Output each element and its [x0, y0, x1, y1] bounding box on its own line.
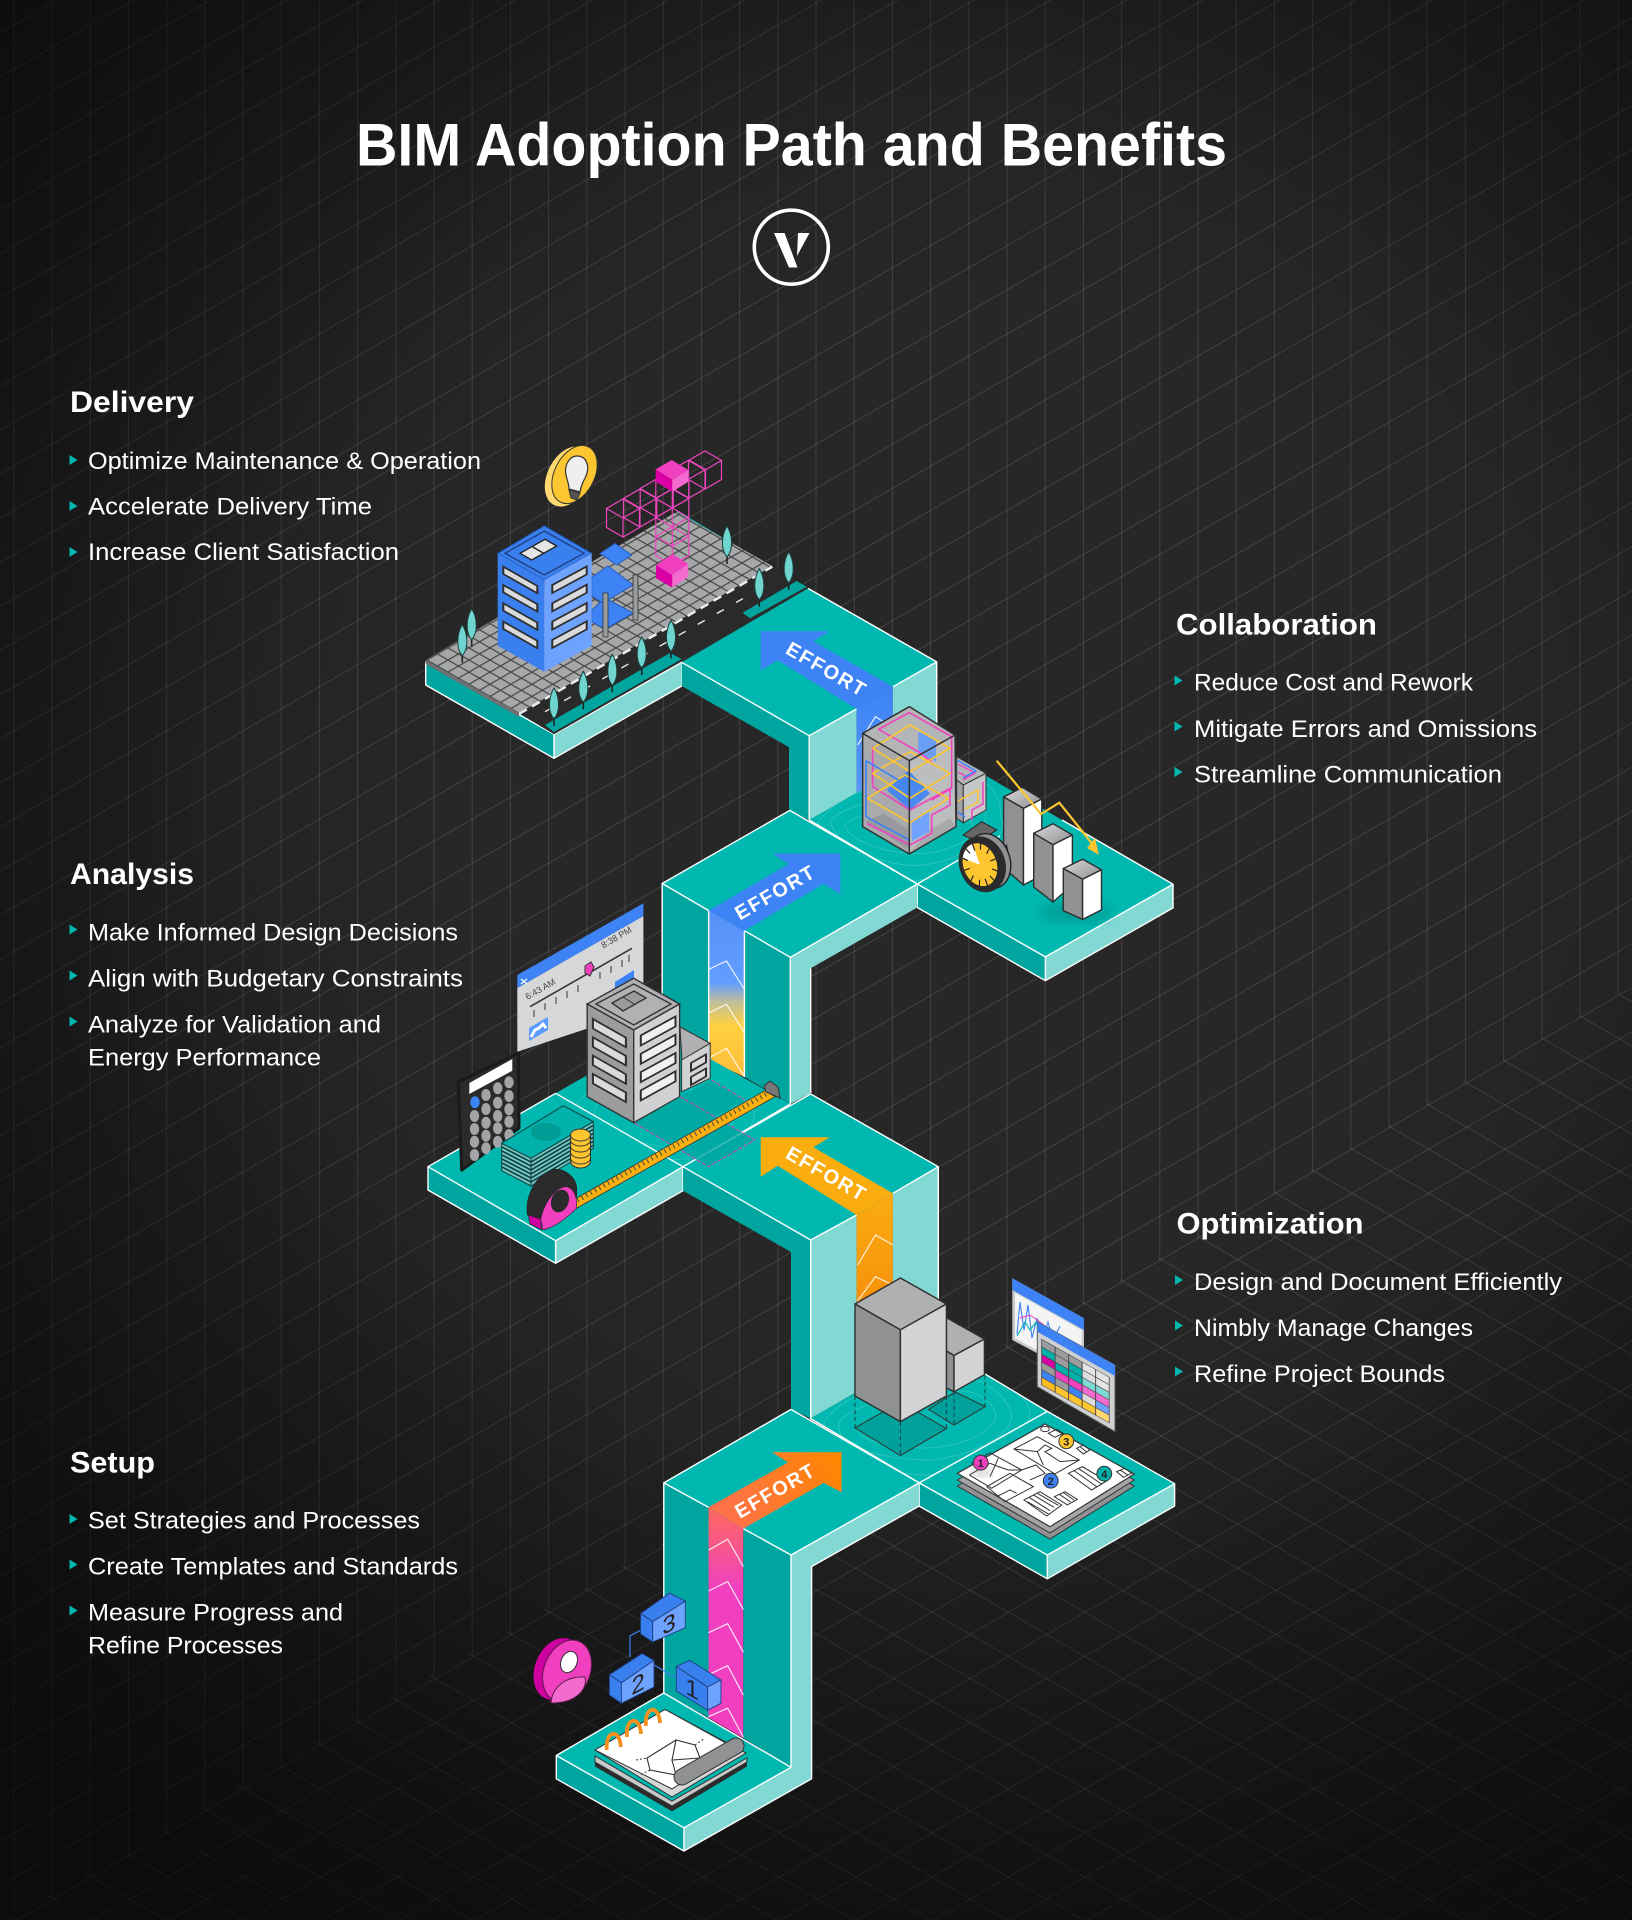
window: line chart	[1012, 1278, 1084, 1378]
text block: Analysis	[70, 858, 463, 1072]
panel: optimization platform	[810, 1373, 1176, 1580]
callout pins 1 to 4: 2	[1048, 1476, 1054, 1488]
spiral rings	[607, 1710, 660, 1750]
text block: Analysis: Make Informed Design Decisions	[88, 920, 458, 947]
text block: Setup: Measure Progress and	[88, 1599, 343, 1626]
arrow: effort orange up-right: EFFORT	[731, 1460, 819, 1523]
callout pins 1 to 4: 1	[978, 1458, 984, 1470]
path: setup climb	[664, 1409, 919, 1851]
text block: Collaboration: Streamline Communication	[1194, 762, 1502, 789]
text block: Collaboration: Mitigate Errors and Omissions	[1194, 716, 1537, 743]
window: daylight timeline: 8:38 PM	[599, 925, 633, 950]
tall massing block	[855, 1278, 946, 1422]
big grey massing model	[855, 1278, 985, 1456]
blue pavilion	[592, 544, 638, 637]
text block: Collaboration: Reduce Cost and Rework	[1194, 670, 1474, 697]
icon: calculator	[458, 1053, 519, 1170]
box 1: 1	[685, 1673, 699, 1706]
building footprint guide	[635, 1080, 755, 1167]
teal verge strips	[545, 581, 807, 732]
path: analysis to collaboration climb	[662, 810, 917, 1104]
text block: Delivery: Delivery	[70, 386, 194, 419]
text block: Optimization: Design and Document Efficiently	[1194, 1269, 1562, 1296]
road centre markings	[545, 585, 767, 712]
box 3: 3	[662, 1608, 676, 1641]
icon: sketchbook with rolled page	[595, 1709, 747, 1811]
icon: money stack and coins	[502, 1106, 593, 1186]
icon: floor plan sheets	[957, 1424, 1134, 1539]
small massing block	[946, 1318, 984, 1392]
text block: Setup: Set Strategies and Processes	[88, 1508, 420, 1535]
shadow under chart	[1039, 901, 1111, 923]
text block: Collaboration: Collaboration	[1176, 608, 1377, 641]
trees	[458, 526, 793, 726]
pink block upper	[656, 460, 688, 492]
small wireframe block	[957, 757, 986, 823]
text block: Optimization	[1175, 1208, 1562, 1388]
wire lattice crane	[606, 451, 722, 565]
path: optimization climb	[683, 1094, 938, 1418]
blue office building	[498, 526, 592, 672]
text block: Setup: Create Templates and Standards	[88, 1554, 458, 1581]
text block: Analysis: Analysis	[70, 858, 194, 891]
window: data table	[1037, 1322, 1115, 1432]
arrow: effort blue up-right: EFFORT	[731, 862, 819, 925]
bar: short	[1063, 859, 1102, 919]
text block: Setup: Refine Processes	[88, 1633, 283, 1660]
numbered process boxes	[609, 1593, 721, 1710]
pink block lower	[656, 554, 688, 588]
text block: Delivery: Accelerate Delivery Time	[88, 494, 372, 520]
panel: analysis platform	[428, 1032, 790, 1263]
road	[519, 566, 808, 734]
text block: Optimization: Refine Project Bounds	[1194, 1361, 1445, 1388]
logo: circled V	[754, 210, 828, 284]
window: daylight timeline	[517, 903, 643, 1052]
callout pins 1 to 4	[972, 1434, 1112, 1488]
title: BIM Adoption Path and Benefits	[356, 112, 1227, 178]
grey analysis building	[587, 978, 710, 1123]
panel: setup platform	[556, 1506, 919, 1851]
bar chart with downward arrow	[997, 761, 1102, 919]
bar: mid	[1034, 824, 1072, 902]
callout pins 1 to 4: 3	[1063, 1436, 1069, 1448]
text block: Setup	[70, 1446, 458, 1660]
rolled page	[682, 1746, 736, 1777]
text block: Delivery: Optimize Maintenance & Operation	[88, 448, 481, 475]
bar: tall	[1004, 787, 1042, 885]
callout pins 1 to 4: 4	[1101, 1469, 1108, 1481]
arrow: effort blue up-right	[709, 854, 840, 931]
window: daylight timeline: 6:43 AM	[523, 977, 557, 1002]
icon: tape measure	[527, 1081, 780, 1230]
path: delivery to collaboration climb	[682, 588, 937, 820]
arrow: effort orange up-left: EFFORT	[782, 1143, 869, 1206]
text block: Optimization: Nimbly Manage Changes	[1194, 1315, 1473, 1342]
box 2: 2	[631, 1668, 645, 1701]
text block: Delivery	[70, 386, 481, 566]
icon: stopwatch	[951, 822, 1018, 899]
text block: Analysis: Align with Budgetary Constraints	[88, 966, 463, 993]
text block: Collaboration	[1174, 608, 1537, 789]
panel: delivery platform	[426, 438, 808, 758]
arrow: effort blue up-left: EFFORT	[782, 638, 869, 701]
text block: Optimization: Optimization	[1176, 1208, 1364, 1240]
text block: Setup: Setup	[70, 1446, 155, 1479]
arrow: effort orange up-right	[708, 1452, 842, 1529]
icon: person badge	[525, 1631, 600, 1709]
wireframe BIM tower	[863, 707, 986, 854]
text block: Analysis: Analyze for Validation and	[88, 1011, 381, 1038]
arrow: effort orange up-left	[761, 1137, 893, 1215]
trend arrow	[997, 761, 1099, 855]
text block: Delivery: Increase Client Satisfaction	[88, 539, 399, 566]
panel: collaboration platform	[809, 747, 1173, 981]
arrow: effort blue up-left	[761, 631, 893, 709]
icon: light bulb disc	[535, 438, 606, 515]
text block: Analysis: Energy Performance	[88, 1045, 321, 1072]
paved plaza grid	[426, 512, 772, 717]
